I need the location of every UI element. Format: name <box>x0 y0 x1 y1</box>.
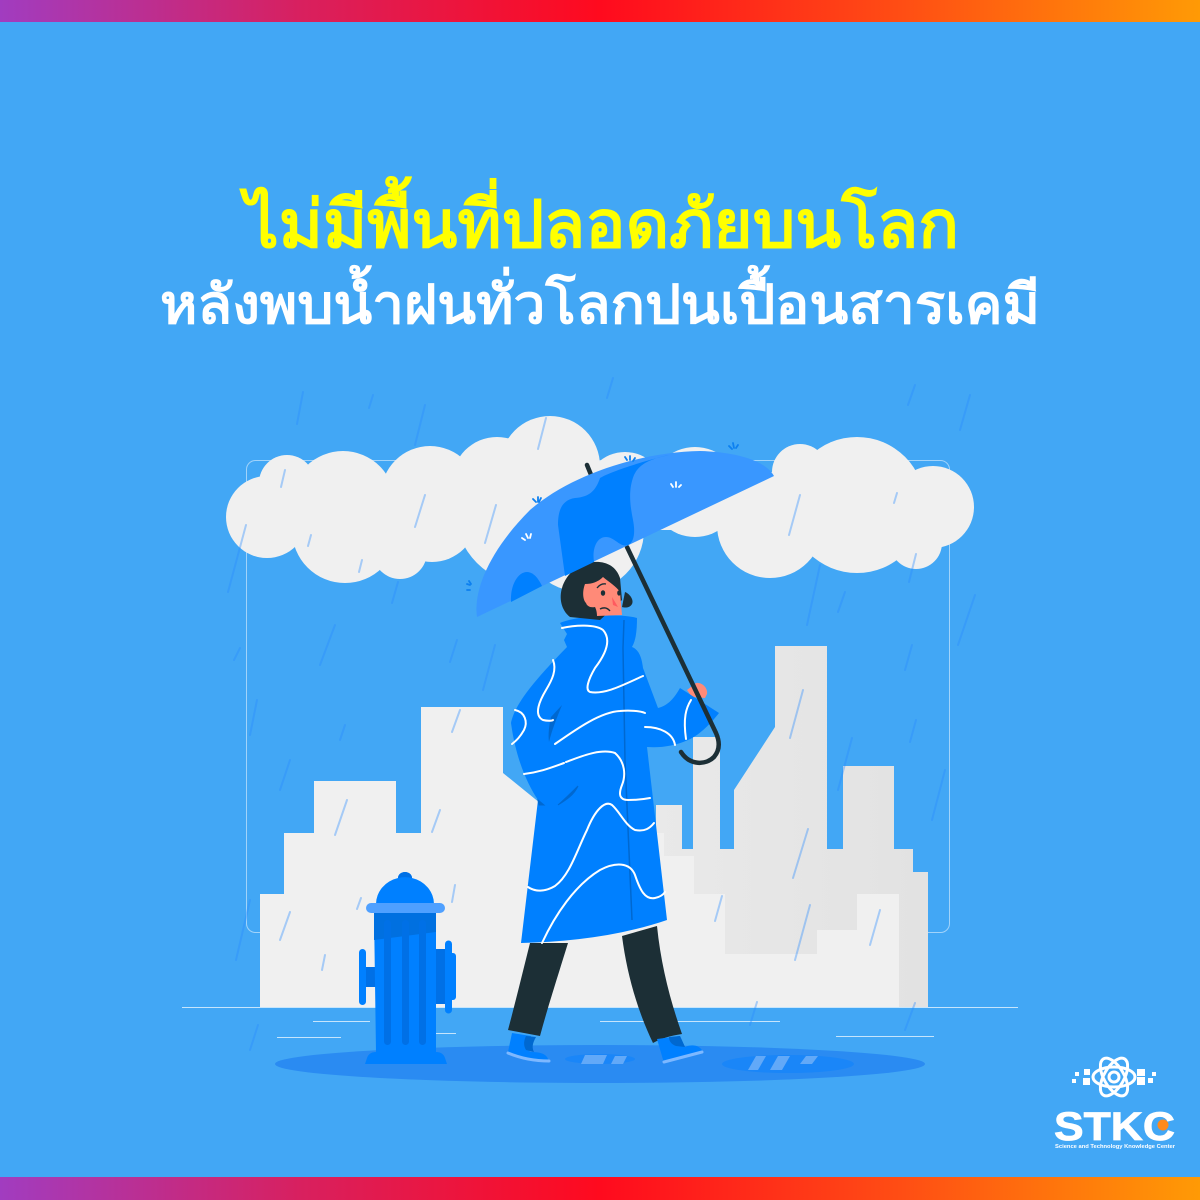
logo tagline: Science and Technology Knowledge Center <box>1055 1144 1176 1150</box>
rain splash marks <box>467 443 738 590</box>
coat white wavy lines <box>512 626 691 943</box>
logo pixels <box>1072 1069 1156 1085</box>
hydrant left flange <box>359 949 366 1005</box>
mouth and brow <box>597 584 610 611</box>
hair <box>561 562 622 620</box>
hydrant right flange <box>445 940 456 1014</box>
hydrant <box>359 872 456 1064</box>
hydrant shade <box>374 913 436 940</box>
ground lines <box>182 1008 1018 1038</box>
right shoe <box>657 1036 703 1063</box>
coat seam <box>623 620 632 920</box>
title: ไม่มีพื้นที่ปลอดภัยบนโลก <box>239 175 959 261</box>
woman <box>508 562 719 1063</box>
top gradient bar <box>0 0 1200 22</box>
hydrant knob <box>398 872 412 878</box>
skyline light buildings <box>260 707 899 1007</box>
logo dot <box>1158 1120 1168 1130</box>
hydrant right valve <box>434 949 447 1004</box>
hydrant band <box>366 903 445 913</box>
head <box>561 562 633 620</box>
umbrella handle <box>587 465 719 763</box>
puddles <box>565 1054 854 1073</box>
rain <box>228 378 975 1050</box>
front leg <box>622 926 682 1043</box>
back leg <box>508 943 568 1036</box>
logo <box>1054 1054 1176 1150</box>
coat pocket shade <box>549 705 562 742</box>
skyline factory <box>656 646 928 1007</box>
raincoat <box>511 616 719 943</box>
thin frame <box>246 460 950 932</box>
umbrella <box>476 451 774 617</box>
hydrant body <box>365 913 447 1064</box>
hydrant cap <box>376 872 434 904</box>
hand <box>687 683 707 698</box>
hydrant ribs <box>384 920 426 1045</box>
umbrella dark panel <box>558 455 669 576</box>
puddle shadow <box>275 1045 925 1083</box>
nose <box>612 597 618 607</box>
logo atom <box>1093 1054 1135 1100</box>
umbrella canopy <box>476 451 774 617</box>
bottom gradient bar <box>0 1177 1200 1200</box>
left shoe <box>508 1033 549 1062</box>
hair tuft <box>622 592 633 608</box>
logo wordmark: STKC <box>1054 1105 1175 1149</box>
subtitle: หลังพบน้ำฝนทั่วโลกปนเปื้อนสารเคมี <box>160 265 1040 335</box>
umbrella small dark panel <box>511 572 542 602</box>
face <box>583 577 622 616</box>
eyes <box>601 590 621 596</box>
hydrant left valve <box>366 967 376 987</box>
coat lower pocket <box>538 786 578 805</box>
clouds <box>226 416 974 592</box>
